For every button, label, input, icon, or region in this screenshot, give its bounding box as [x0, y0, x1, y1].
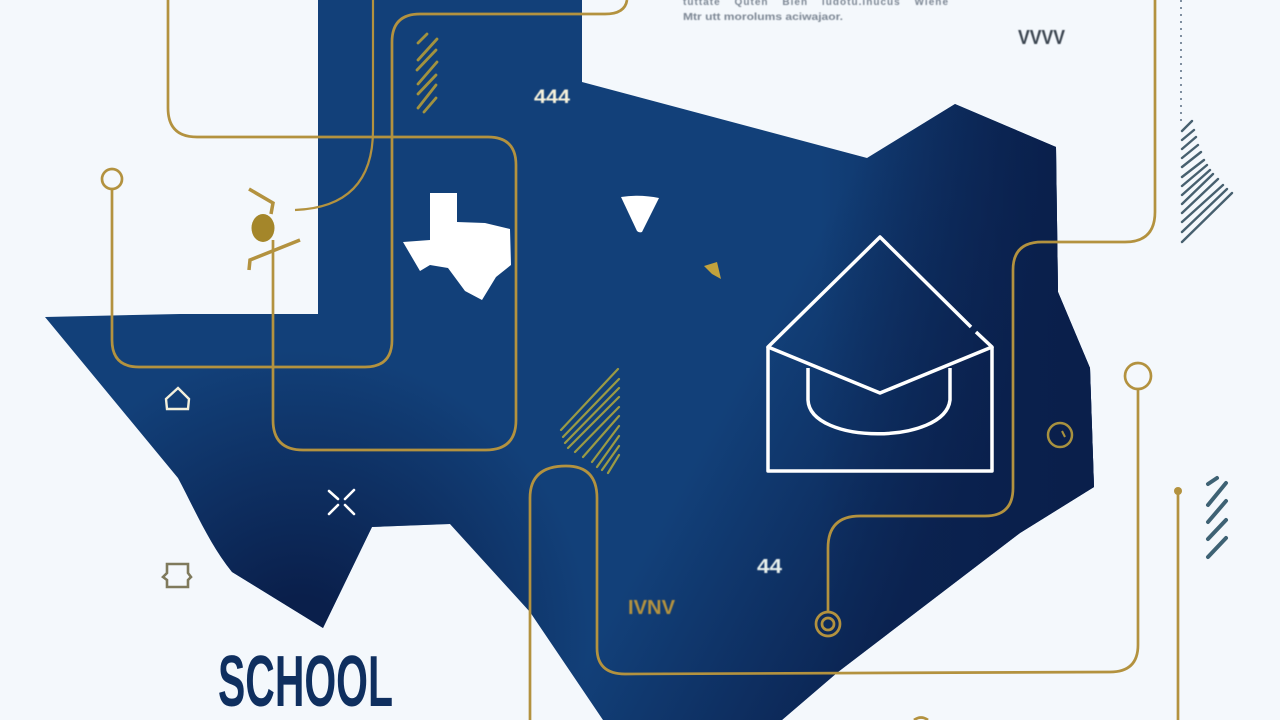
gold circuit line: center top curve	[295, 0, 373, 210]
top text block	[683, 0, 948, 23]
gold circuit line: left node	[102, 0, 627, 367]
white small Texas icon	[403, 193, 511, 300]
white glyph label top: 444	[534, 87, 570, 108]
hatch triangle: top right	[1182, 121, 1232, 242]
gold glyph label: IVNV	[628, 597, 676, 619]
gold circuit line: lower loop	[530, 363, 1151, 720]
gold circuit line: top-left loop	[168, 0, 516, 450]
hatch: center gold triangle	[561, 369, 619, 473]
gold emblem	[249, 189, 300, 270]
graduation cap icon	[768, 237, 992, 471]
white house icon	[166, 388, 189, 409]
octagon outline icon	[163, 564, 191, 587]
top text block: Mtr utt morolums aciwajaor.	[683, 12, 843, 23]
glyph: dark zigzag label: VVVV	[1018, 27, 1066, 49]
gold circuit line: right to cap	[816, 0, 1155, 636]
gold outline circle icon	[1048, 423, 1072, 447]
gold arc at bottom edge	[914, 718, 928, 720]
dotted vertical line	[1180, 0, 1182, 122]
cross mark icon	[329, 490, 354, 514]
title: SCHOOL	[218, 642, 393, 720]
white glyph label bottom: 44	[757, 556, 783, 578]
white triangle pennant	[621, 196, 659, 232]
gold line: right drop with dot	[1174, 487, 1182, 720]
gold small mark	[704, 262, 721, 279]
hatch: top gold	[417, 34, 437, 112]
hatch: right lower	[1208, 478, 1226, 557]
